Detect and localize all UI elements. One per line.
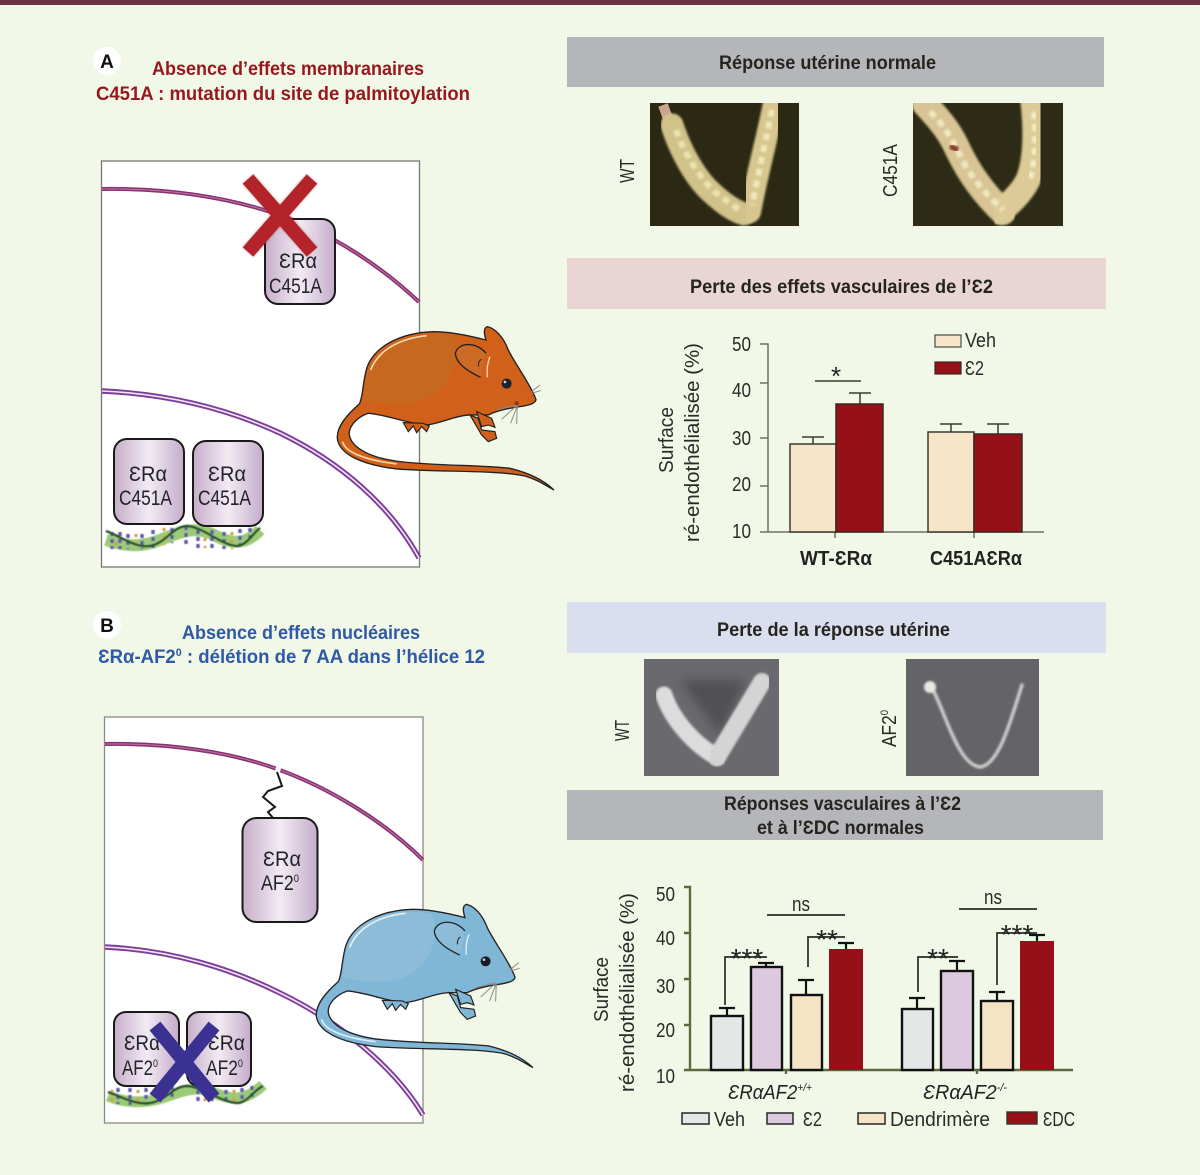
header: réponse utérine normale (567, 37, 1104, 87)
section B heading: 0 (176, 647, 182, 659)
receptor: membrane C451A: ƐRα (279, 250, 317, 273)
receptor: nuclear C451A left: ƐRα (129, 463, 167, 486)
significance: *** (731, 943, 763, 974)
y axis ticks: 30 (732, 428, 751, 450)
bars (790, 393, 1022, 532)
legend (682, 1109, 1075, 1131)
bar chart: AF2 (591, 884, 1075, 1131)
section A heading: C451A : mutation du site de palmitoylation (96, 84, 470, 105)
label: WT: WT (617, 159, 639, 183)
legend: ƐDC (1043, 1109, 1075, 1131)
receptor: nuclear C451A right (193, 441, 263, 526)
receptor: nuclear C451A right: C451A (198, 487, 251, 510)
receptor: AF2 nuclear left: 0 (153, 1058, 158, 1070)
header: perte des effets vasculaires: Perte des effets vasculaires de l’Ɛ2 (690, 277, 993, 298)
receptor: AF2 nuclear left: AF2 (122, 1057, 161, 1080)
receptor: AF2 nuclear right: AF2 (206, 1057, 245, 1080)
photo: WT uterus (650, 103, 799, 226)
receptor: AF2 nuclear right (187, 1012, 251, 1086)
header: réponses vasculaires normales (567, 790, 1103, 840)
header: perte des effets vasculaires (567, 258, 1106, 309)
significance (725, 887, 1037, 1005)
section B heading: ƐRα-AF2 (98, 647, 178, 668)
significance: *** (1001, 919, 1033, 950)
section A heading (93, 47, 470, 105)
x axis labels (800, 548, 1023, 570)
icon: red cross (248, 179, 312, 252)
eye (502, 379, 512, 389)
label: WT: WT (612, 720, 634, 741)
y axis ticks: 50 (732, 334, 751, 356)
section B heading: Absence d’effets nucléaires (182, 623, 420, 644)
legend: Veh (714, 1109, 745, 1131)
y axis ticks: 30 (656, 976, 675, 998)
receptor: nuclear C451A left: C451A (119, 487, 172, 510)
receptor: AF2 membrane: ƐRα (263, 848, 301, 871)
whiskers (476, 963, 520, 1002)
y axis title: Surface (656, 407, 678, 473)
y axis title: ré-endothélialisée (%) (682, 343, 704, 542)
label: AF2: AF2 (879, 710, 901, 747)
receptor: AF2 membrane (242, 818, 318, 922)
photo: WT uterus grey (644, 659, 779, 776)
DNA helix (106, 526, 260, 549)
x axis labels: C451AƐRα (930, 548, 1023, 570)
y axis ticks: 40 (732, 380, 751, 402)
paws (403, 423, 429, 433)
receptor: nuclear C451A left (114, 439, 184, 524)
x axis labels: -/- (997, 1082, 1007, 1094)
y axis ticks: 20 (656, 1020, 675, 1042)
receptor: AF2 membrane: 0 (294, 873, 299, 885)
receptor: AF2 membrane: AF2 (261, 872, 300, 895)
significance: ** (816, 924, 838, 955)
header: perte de la réponse utérine: Perte de la réponse utérine (717, 620, 950, 641)
photo: AF2 uterus grey (906, 659, 1039, 776)
header: réponse utérine normale: Réponse utérine normale (719, 53, 936, 74)
x axis labels (728, 1082, 1007, 1104)
y axis ticks: 40 (656, 928, 675, 950)
section A heading: Absence d’effets membranaires (152, 59, 424, 80)
receptor: membrane C451A (265, 219, 335, 304)
legend: Ɛ2 (965, 358, 984, 380)
receptor: AF2 nuclear right: 0 (238, 1058, 243, 1070)
receptor: membrane C451A: C451A (269, 275, 322, 298)
panel B: cell diagram (104, 717, 423, 1123)
panel A: cell diagram (102, 161, 420, 567)
icon: blue mouse (316, 904, 533, 1068)
eye (481, 956, 491, 966)
receptor: AF2 nuclear left (114, 1012, 179, 1086)
header: réponses vasculaires normales: et à l’ƐDC normales (757, 818, 924, 839)
bars (711, 935, 1054, 1070)
ear (434, 922, 465, 955)
icon: orange mouse (337, 327, 554, 490)
significance: * (831, 361, 841, 391)
whiskers (497, 385, 541, 424)
y axis ticks (656, 884, 1073, 1088)
significance: ** (927, 943, 949, 974)
significance (815, 361, 861, 391)
y axis ticks: 20 (732, 474, 751, 496)
x axis labels: +/+ (797, 1082, 813, 1094)
membrane gap (275, 765, 282, 774)
x axis labels: WT-ƐRα (800, 548, 873, 570)
legend: Ɛ2 (803, 1109, 822, 1131)
y axis title: Surface (591, 957, 613, 1022)
x axis labels: ƐRαAF2 (728, 1082, 803, 1104)
y axis title (591, 893, 639, 1092)
y axis ticks (732, 334, 1044, 543)
ear (455, 345, 486, 377)
tether (263, 772, 282, 818)
y axis ticks: 50 (656, 884, 675, 906)
receptor: nuclear C451A right: ƐRα (208, 463, 246, 486)
significance: ns (792, 894, 810, 916)
section B heading: : délétion de 7 AA dans l’hélice 12 (182, 647, 485, 668)
icon: blue cross (155, 1026, 214, 1098)
section A heading: A (100, 52, 114, 73)
receptor: AF2 nuclear left: ƐRα (124, 1032, 160, 1055)
significance: ns (984, 887, 1002, 909)
receptor: AF2 nuclear right: ƐRα (208, 1032, 245, 1055)
label: AF2: 0 (879, 710, 891, 715)
y axis ticks: 10 (732, 521, 751, 543)
x axis labels: ƐRαAF2 (923, 1082, 998, 1104)
y axis ticks: 10 (656, 1066, 675, 1088)
paws (382, 1000, 408, 1010)
legend (935, 330, 996, 380)
y axis title: ré-endothélialisée (%) (617, 893, 639, 1092)
DNA helix (108, 1085, 263, 1105)
photo: C451A uterus (913, 103, 1063, 226)
bar chart: WT vs C451A (656, 330, 1044, 570)
legend: Veh (965, 330, 996, 352)
top bar (0, 0, 1200, 5)
header: réponses vasculaires normales: Réponses vasculaires à l’Ɛ2 (724, 794, 961, 815)
y axis title (656, 343, 704, 542)
section B heading: B (100, 616, 114, 637)
section B heading (93, 611, 485, 668)
label: C451A: C451A (880, 143, 902, 197)
legend: Dendrimère (890, 1109, 990, 1131)
header: perte de la réponse utérine (567, 602, 1106, 653)
